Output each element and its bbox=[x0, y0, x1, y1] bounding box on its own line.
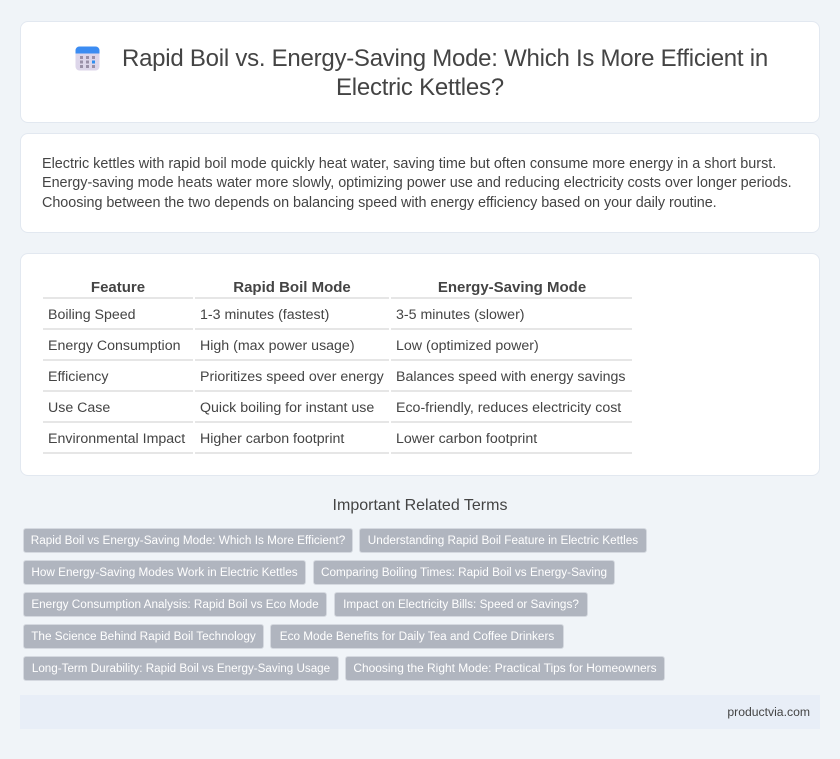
tag: Rapid Boil vs Energy-Saving Mode: Which Is More Efficient? bbox=[31, 534, 345, 547]
row: use case: Use Case bbox=[48, 400, 110, 416]
row: use case: Eco-friendly, reduces electricity cost bbox=[396, 400, 621, 416]
row: use case bbox=[48, 400, 622, 416]
row: environmental impact: Lower carbon footprint bbox=[396, 431, 537, 447]
footer source: productvia.com bbox=[727, 705, 810, 719]
row: boiling speed bbox=[48, 307, 525, 323]
table header: Rapid Boil Mode bbox=[233, 279, 351, 296]
tag bbox=[270, 624, 564, 649]
tag: Choosing the Right Mode: Practical Tips for Homeowners bbox=[353, 661, 657, 675]
row: environmental impact: Environmental Impact bbox=[48, 431, 185, 447]
row: energy consumption: High (max power usage) bbox=[200, 338, 355, 354]
row: efficiency: Efficiency bbox=[48, 369, 108, 385]
row: environmental impact bbox=[48, 431, 538, 447]
tag bbox=[334, 592, 588, 617]
tag: Impact on Electricity Bills: Speed or Savings? bbox=[343, 598, 579, 611]
related term tags bbox=[23, 528, 665, 681]
tag: How Energy-Saving Modes Work in Electric Kettles bbox=[31, 566, 298, 579]
row: efficiency: Balances speed with energy savings bbox=[396, 369, 626, 385]
panel: intro bbox=[20, 133, 820, 233]
row: boiling speed: 1-3 minutes (fastest) bbox=[200, 307, 329, 323]
panel: comparison table bbox=[20, 253, 820, 476]
tag: Eco Mode Benefits for Daily Tea and Coffee Drinkers bbox=[280, 630, 554, 643]
table header: Feature bbox=[91, 279, 145, 296]
title: Rapid Boil vs. Energy-Saving Mode: Which Is More Efficient in bbox=[122, 45, 768, 72]
tag bbox=[23, 560, 306, 585]
row: environmental impact: Higher carbon footprint bbox=[200, 431, 344, 447]
row: use case: Quick boiling for instant use bbox=[200, 400, 374, 416]
title bbox=[122, 45, 768, 101]
tag: Long-Term Durability: Rapid Boil vs Energy-Saving Usage bbox=[32, 662, 330, 675]
tag: Energy Consumption Analysis: Rapid Boil vs Eco Mode bbox=[31, 598, 319, 611]
row: energy consumption bbox=[48, 338, 539, 354]
text block: intro paragraph: Energy-saving mode heats water more slowly, optimizing power use and reducing electricity costs over longer periods. bbox=[42, 175, 792, 191]
tag bbox=[313, 560, 615, 585]
table header: Energy-Saving Mode bbox=[438, 279, 586, 296]
text block: intro paragraph: Electric kettles with rapid boil mode quickly heat water, saving time but often consume more energy in a short burst. bbox=[42, 156, 776, 172]
title: Electric Kettles? bbox=[336, 74, 504, 101]
tag bbox=[345, 656, 665, 681]
row: energy consumption: Energy Consumption bbox=[48, 338, 180, 354]
comparison table bbox=[43, 279, 632, 454]
row: boiling speed: 3-5 minutes (slower) bbox=[396, 307, 525, 323]
text block: intro paragraph: Choosing between the two depends on balancing speed with energy efficiency based on your daily routine. bbox=[42, 194, 717, 210]
footer bar bbox=[20, 695, 820, 729]
tag: Understanding Rapid Boil Feature in Electric Kettles bbox=[368, 534, 638, 547]
row: efficiency: Prioritizes speed over energy bbox=[200, 369, 384, 385]
tag: The Science Behind Rapid Boil Technology bbox=[31, 630, 256, 643]
row: efficiency bbox=[48, 369, 626, 385]
row: energy consumption: Low (optimized power) bbox=[396, 338, 539, 354]
row: boiling speed: Boiling Speed bbox=[48, 307, 136, 323]
text block: intro paragraph bbox=[42, 156, 792, 210]
table header bbox=[91, 279, 586, 296]
icon: calendar grid bbox=[76, 46, 100, 70]
heading: related terms: Important Related Terms bbox=[333, 497, 507, 514]
tag bbox=[23, 656, 339, 681]
tag bbox=[23, 624, 264, 649]
tag: Comparing Boiling Times: Rapid Boil vs Energy-Saving bbox=[321, 566, 607, 579]
panel: title card bbox=[20, 21, 820, 123]
tag bbox=[23, 592, 327, 617]
tag bbox=[359, 528, 647, 553]
tag bbox=[23, 528, 353, 553]
